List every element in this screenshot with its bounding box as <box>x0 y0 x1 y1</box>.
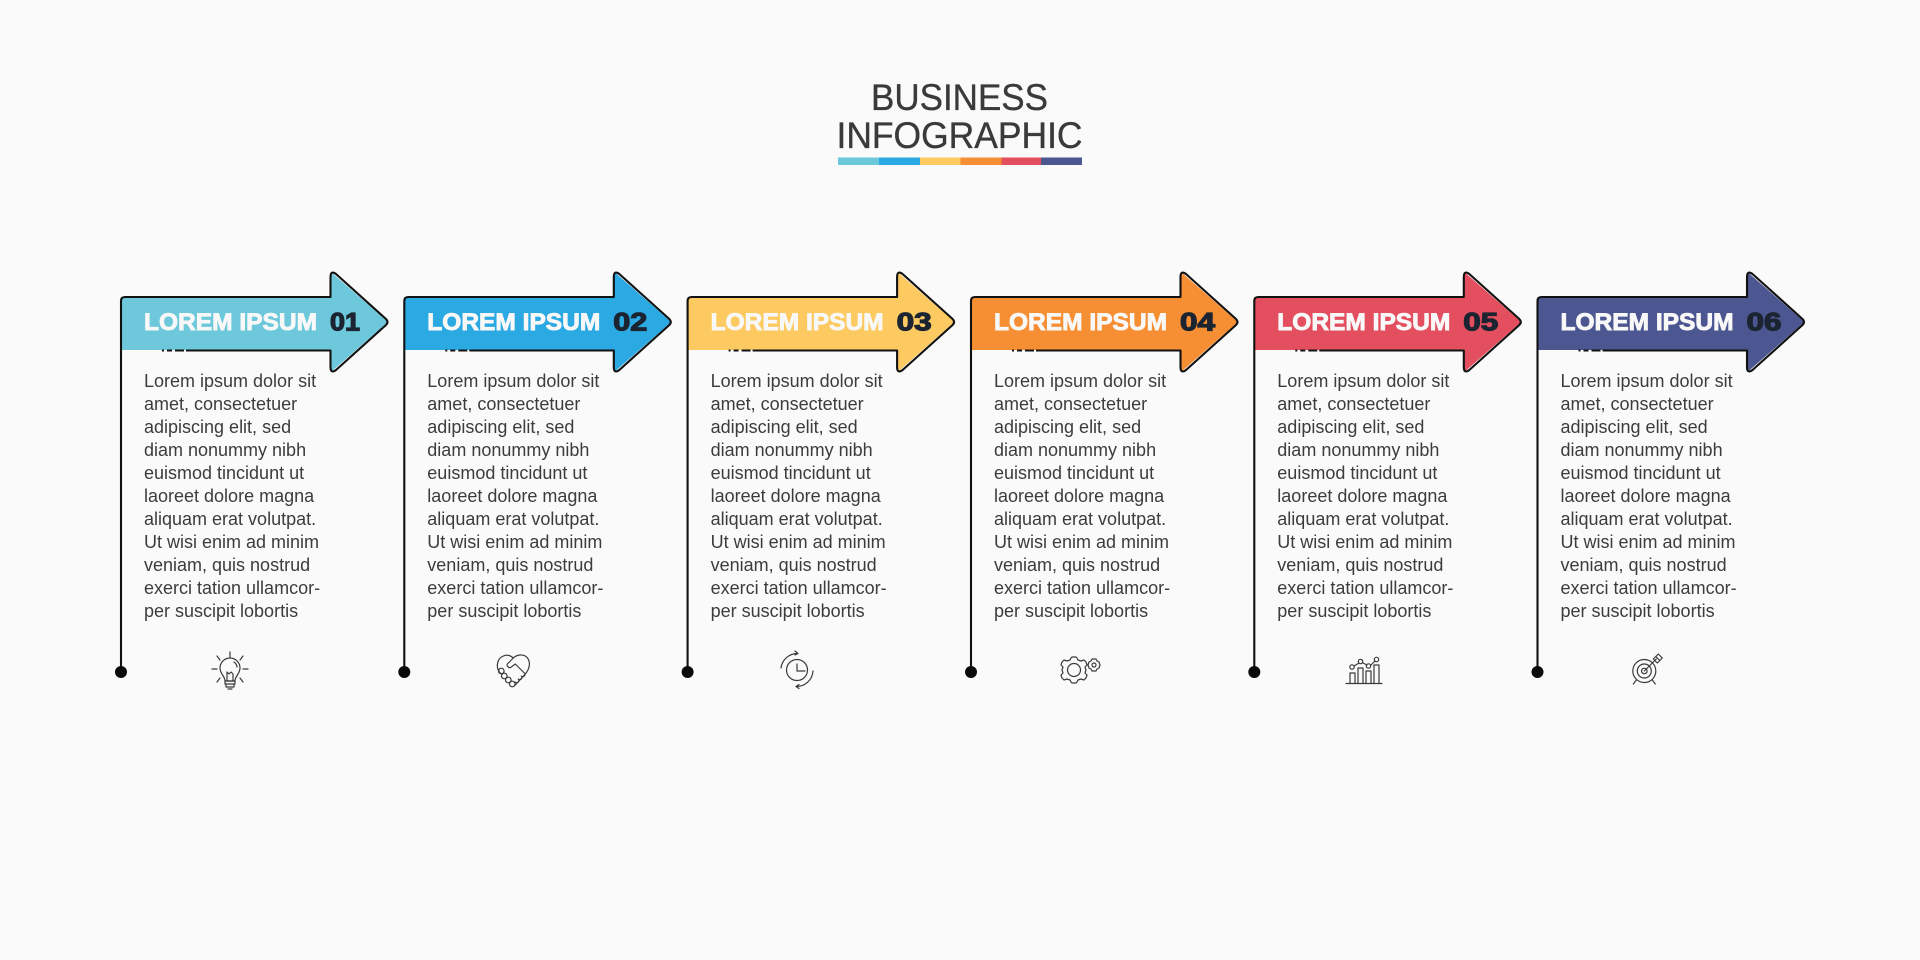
pole dot 03 <box>682 666 694 678</box>
title: INFOGRAPHIC <box>836 115 1082 156</box>
body text 02: Lorem ipsum dolor sit <box>427 371 599 391</box>
pole dot 06 <box>1532 666 1544 678</box>
body text 06: per suscipit lobortis <box>1560 601 1715 621</box>
body text 01: Lorem ipsum dolor sit <box>144 371 316 391</box>
body text 04: aliquam erat volutpat. <box>994 509 1166 529</box>
body text 03: amet, consectetuer <box>711 394 864 414</box>
panel: step 03 <box>682 272 955 688</box>
body text 05: euismod tincidunt ut <box>1277 463 1437 483</box>
number 06: 06 <box>1746 308 1782 336</box>
arrow 04 outline and pole <box>971 273 1238 672</box>
body text 04: amet, consectetuer <box>994 394 1147 414</box>
icon: clock with cycle arrows <box>781 651 813 688</box>
body text 05: adipiscing elit, sed <box>1277 417 1424 437</box>
body text 03: Lorem ipsum dolor sit <box>711 371 883 391</box>
panel: step 01 <box>115 272 388 689</box>
panel: step 04 <box>965 272 1238 683</box>
body text 02: exerci tation ullamcor- <box>427 578 603 598</box>
arrow 03 outline and pole <box>688 273 954 672</box>
body text 03: diam nonummy nibh <box>711 440 873 460</box>
body text 05: laoreet dolore magna <box>1277 486 1448 506</box>
heading 04: LOREM IPSUM <box>994 309 1167 336</box>
body text 01: laoreet dolore magna <box>144 486 315 506</box>
body text 03: per suscipit lobortis <box>711 601 865 621</box>
number 02: 02 <box>613 308 647 336</box>
body text 05: Lorem ipsum dolor sit <box>1277 371 1449 391</box>
panel: step 05 <box>1248 272 1521 684</box>
arrow 05 <box>1254 272 1521 372</box>
body text 02: diam nonummy nibh <box>427 440 589 460</box>
body text 01: Ut wisi enim ad minim <box>144 532 319 552</box>
arrow 02 outline and pole <box>404 273 671 672</box>
body text 05: amet, consectetuer <box>1277 394 1430 414</box>
body text 02: per suscipit lobortis <box>427 601 581 621</box>
body text 03: veniam, quis nostrud <box>711 555 877 575</box>
body text 04: laoreet dolore magna <box>994 486 1165 506</box>
arrow 03 <box>688 272 955 372</box>
number 05: 05 <box>1463 308 1498 336</box>
arrow 01 <box>121 272 388 372</box>
body text 05: diam nonummy nibh <box>1277 440 1439 460</box>
title <box>836 77 1082 156</box>
body text 05: Ut wisi enim ad minim <box>1277 532 1452 552</box>
body text 01: diam nonummy nibh <box>144 440 306 460</box>
body text 04: Lorem ipsum dolor sit <box>994 371 1166 391</box>
body text 02: euismod tincidunt ut <box>427 463 587 483</box>
body text 04: euismod tincidunt ut <box>994 463 1154 483</box>
heading 02: LOREM IPSUM <box>427 309 600 336</box>
body text 01: per suscipit lobortis <box>144 601 298 621</box>
body text 03: laoreet dolore magna <box>711 486 882 506</box>
heading 03: LOREM IPSUM <box>711 309 884 336</box>
body text 02: adipiscing elit, sed <box>427 417 574 437</box>
body text 06: exerci tation ullamcor- <box>1560 578 1737 598</box>
body text 04: per suscipit lobortis <box>994 601 1148 621</box>
body text 06: Lorem ipsum dolor sit <box>1560 371 1733 391</box>
body text 06: euismod tincidunt ut <box>1560 463 1721 483</box>
body text 06: diam nonummy nibh <box>1560 440 1723 460</box>
number 03: 03 <box>897 308 932 336</box>
body text 03: euismod tincidunt ut <box>711 463 871 483</box>
arrow 06 outline and pole <box>1538 273 1804 672</box>
pole dot 02 <box>398 666 410 678</box>
body text 05: per suscipit lobortis <box>1277 601 1431 621</box>
body text 06: veniam, quis nostrud <box>1560 555 1727 575</box>
heading 05: LOREM IPSUM <box>1277 309 1450 336</box>
heading 06: LOREM IPSUM <box>1560 309 1734 336</box>
body text 06: aliquam erat volutpat. <box>1560 509 1733 529</box>
body text 01: veniam, quis nostrud <box>144 555 310 575</box>
body text 02: veniam, quis nostrud <box>427 555 593 575</box>
body text 04: Ut wisi enim ad minim <box>994 532 1169 552</box>
body text 01: exerci tation ullamcor- <box>144 578 320 598</box>
body text 03: exerci tation ullamcor- <box>711 578 887 598</box>
body text 01: aliquam erat volutpat. <box>144 509 316 529</box>
body text 01: amet, consectetuer <box>144 394 297 414</box>
title: BUSINESS <box>871 77 1048 118</box>
pole dot 05 <box>1248 666 1260 678</box>
icon: light bulb <box>212 652 248 689</box>
pole dot 01 <box>115 666 127 678</box>
body text 03: aliquam erat volutpat. <box>711 509 883 529</box>
heading 01: LOREM IPSUM <box>144 309 317 336</box>
body text 06: amet, consectetuer <box>1560 394 1714 414</box>
body text 02: amet, consectetuer <box>427 394 580 414</box>
body text 04: exerci tation ullamcor- <box>994 578 1170 598</box>
pole dot 04 <box>965 666 977 678</box>
body text 02: Ut wisi enim ad minim <box>427 532 602 552</box>
icon: handshake <box>497 655 529 687</box>
icon: target with arrow <box>1633 654 1662 684</box>
body text 03: adipiscing elit, sed <box>711 417 858 437</box>
arrow 06 <box>1538 272 1804 372</box>
panel: step 02 <box>398 272 671 687</box>
body text 01: euismod tincidunt ut <box>144 463 304 483</box>
body text 05: aliquam erat volutpat. <box>1277 509 1449 529</box>
number 04: 04 <box>1180 308 1215 336</box>
body text 06: Ut wisi enim ad minim <box>1560 532 1736 552</box>
title colour bar <box>838 158 1082 165</box>
body text 06: adipiscing elit, sed <box>1560 417 1708 437</box>
arrow 02 <box>404 272 671 372</box>
icon: bar chart with trend line <box>1346 657 1382 684</box>
body text 06: laoreet dolore magna <box>1560 486 1732 506</box>
body text 04: diam nonummy nibh <box>994 440 1156 460</box>
icon: gears <box>1061 657 1100 683</box>
body text 04: veniam, quis nostrud <box>994 555 1160 575</box>
body text 04: adipiscing elit, sed <box>994 417 1141 437</box>
body text 05: veniam, quis nostrud <box>1277 555 1443 575</box>
body text 02: laoreet dolore magna <box>427 486 598 506</box>
body text 05: exerci tation ullamcor- <box>1277 578 1453 598</box>
arrow 01 outline and pole <box>121 273 388 672</box>
body text 02: aliquam erat volutpat. <box>427 509 599 529</box>
panel: step 06 <box>1532 272 1804 684</box>
body text 01: adipiscing elit, sed <box>144 417 291 437</box>
body text 03: Ut wisi enim ad minim <box>711 532 886 552</box>
arrow 05 outline and pole <box>1254 273 1521 672</box>
arrow 04 <box>971 272 1238 372</box>
number 01: 01 <box>330 308 360 336</box>
